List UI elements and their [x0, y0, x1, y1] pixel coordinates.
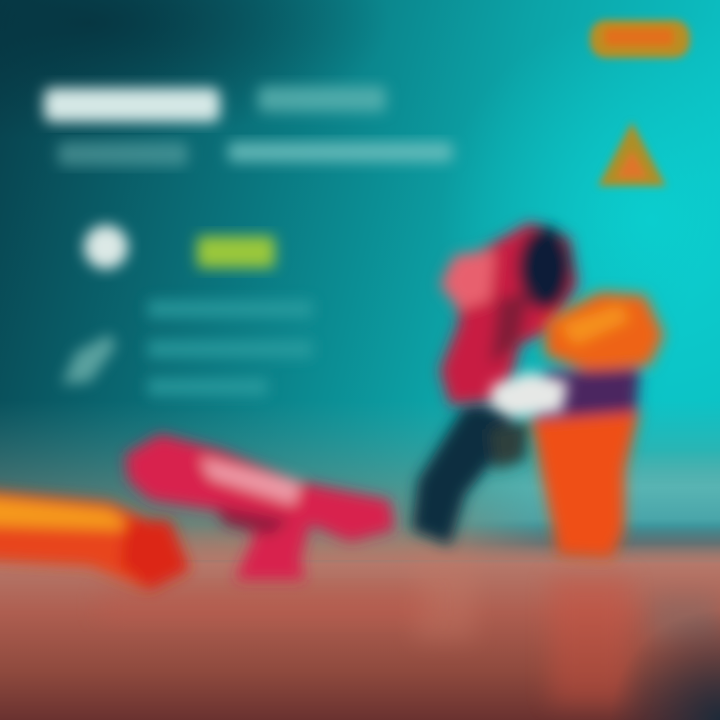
badge: green label: [197, 236, 275, 268]
illustration: standing figure dark legs: [412, 405, 530, 545]
illustration: pink water gun lying on the floor: [125, 434, 395, 580]
floor: [0, 525, 720, 720]
icon: warning triangle: [598, 122, 666, 186]
illustration: red and pink water gun upper: [440, 222, 578, 405]
subheading: blurred text lines: [58, 142, 453, 166]
background: [0, 0, 720, 560]
icon: pencil: [62, 334, 116, 384]
illustration: white hand highlight: [490, 372, 568, 418]
illustration: orange water gun lying on the floor: [0, 490, 190, 590]
text block: blurred body copy: [148, 300, 313, 396]
icon: white circle: [84, 225, 128, 269]
badge: orange logo top right: [590, 20, 690, 58]
heading: blurred title: [44, 86, 386, 122]
illustration: orange water gun body: [530, 292, 664, 558]
